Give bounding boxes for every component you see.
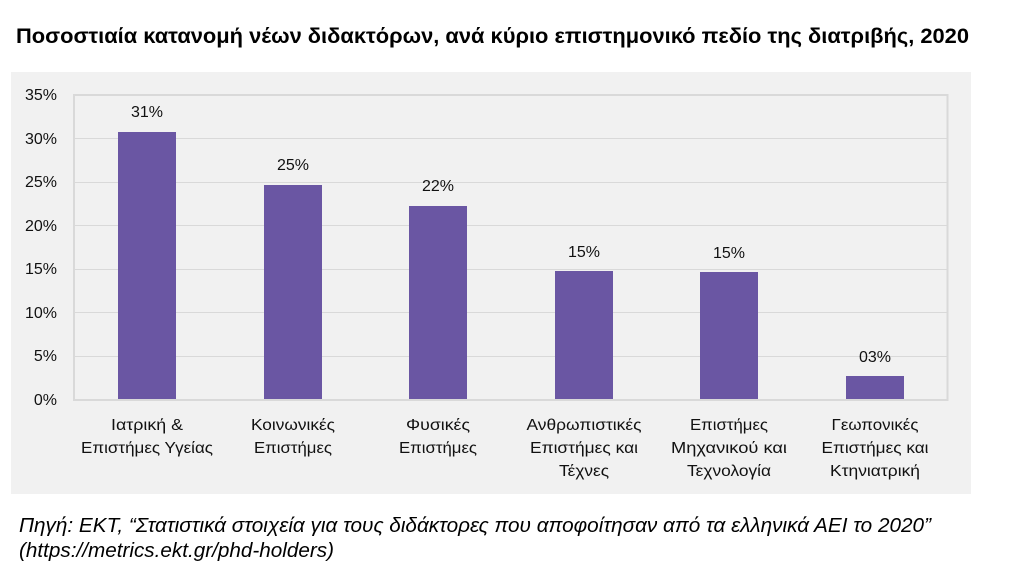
data labels: 15% xyxy=(713,245,745,262)
bar: Φυσικές Επιστήμες 22% xyxy=(409,206,467,399)
category labels: Τεχνολογία xyxy=(687,463,771,480)
category labels: Μηχανικού και xyxy=(671,440,787,457)
category labels: Κοινωνικές xyxy=(251,417,335,434)
category labels: Τέχνες xyxy=(559,463,609,480)
y axis labels xyxy=(25,87,57,409)
category labels: Επιστήμες και xyxy=(530,440,638,457)
category labels: Επιστήμες Υγείας xyxy=(81,440,213,457)
category labels: Ιατρική & xyxy=(111,417,183,434)
title: Ποσοστιαία κατανομή νέων διδακτόρων, ανά κύριο επιστημονικό πεδίο της διατριβής, 2020 xyxy=(16,24,969,48)
data labels: 22% xyxy=(422,178,454,195)
source note: (https://metrics.ekt.gr/phd-holders) xyxy=(19,540,334,562)
category labels: Επιστήμες xyxy=(254,440,332,457)
bar: Γεωπονικές Επιστήμες και Κτηνιατρική 03% xyxy=(846,376,904,399)
category labels: Ανθρωπιστικές xyxy=(526,417,642,434)
data labels: 15% xyxy=(568,244,600,261)
y axis labels: 30% xyxy=(25,131,57,148)
data labels: 25% xyxy=(277,157,309,174)
category labels: Φυσικές xyxy=(406,417,470,434)
category labels: Γεωπονικές xyxy=(832,417,919,434)
data labels xyxy=(131,104,891,366)
category labels: Κτηνιατρική xyxy=(830,463,920,480)
y axis labels: 0% xyxy=(34,392,57,409)
y axis labels: 5% xyxy=(34,348,57,365)
bar chart xyxy=(118,132,904,399)
y axis labels: 10% xyxy=(25,305,57,322)
bar: Επιστήμες Μηχανικού και Τεχνολογία 15% xyxy=(700,272,758,399)
y axis labels: 15% xyxy=(25,261,57,278)
y axis labels: 20% xyxy=(25,218,57,235)
data labels: 03% xyxy=(859,349,891,366)
bar: Κοινωνικές Επιστήμες 25% xyxy=(264,185,322,399)
category labels: Επιστήμες και xyxy=(822,440,929,457)
y axis labels: 25% xyxy=(25,174,57,191)
category labels: Επιστήμες xyxy=(690,417,768,434)
y axis labels: 35% xyxy=(25,87,57,104)
category labels xyxy=(81,417,929,480)
category labels: Επιστήμες xyxy=(399,440,477,457)
panel: chart background xyxy=(11,72,971,494)
bar: Ιατρική & Επιστήμες Υγείας 31% xyxy=(118,132,176,399)
source note: Πηγή: ΕΚΤ, “Στατιστικά στοιχεία για τους διδάκτορες που αποφοίτησαν από τα ελληνικά ΑΕΙ το 2020” xyxy=(19,515,932,537)
source note xyxy=(19,515,932,562)
data labels: 31% xyxy=(131,104,163,121)
bar: Ανθρωπιστικές Επιστήμες και Τέχνες 15% xyxy=(555,271,613,399)
